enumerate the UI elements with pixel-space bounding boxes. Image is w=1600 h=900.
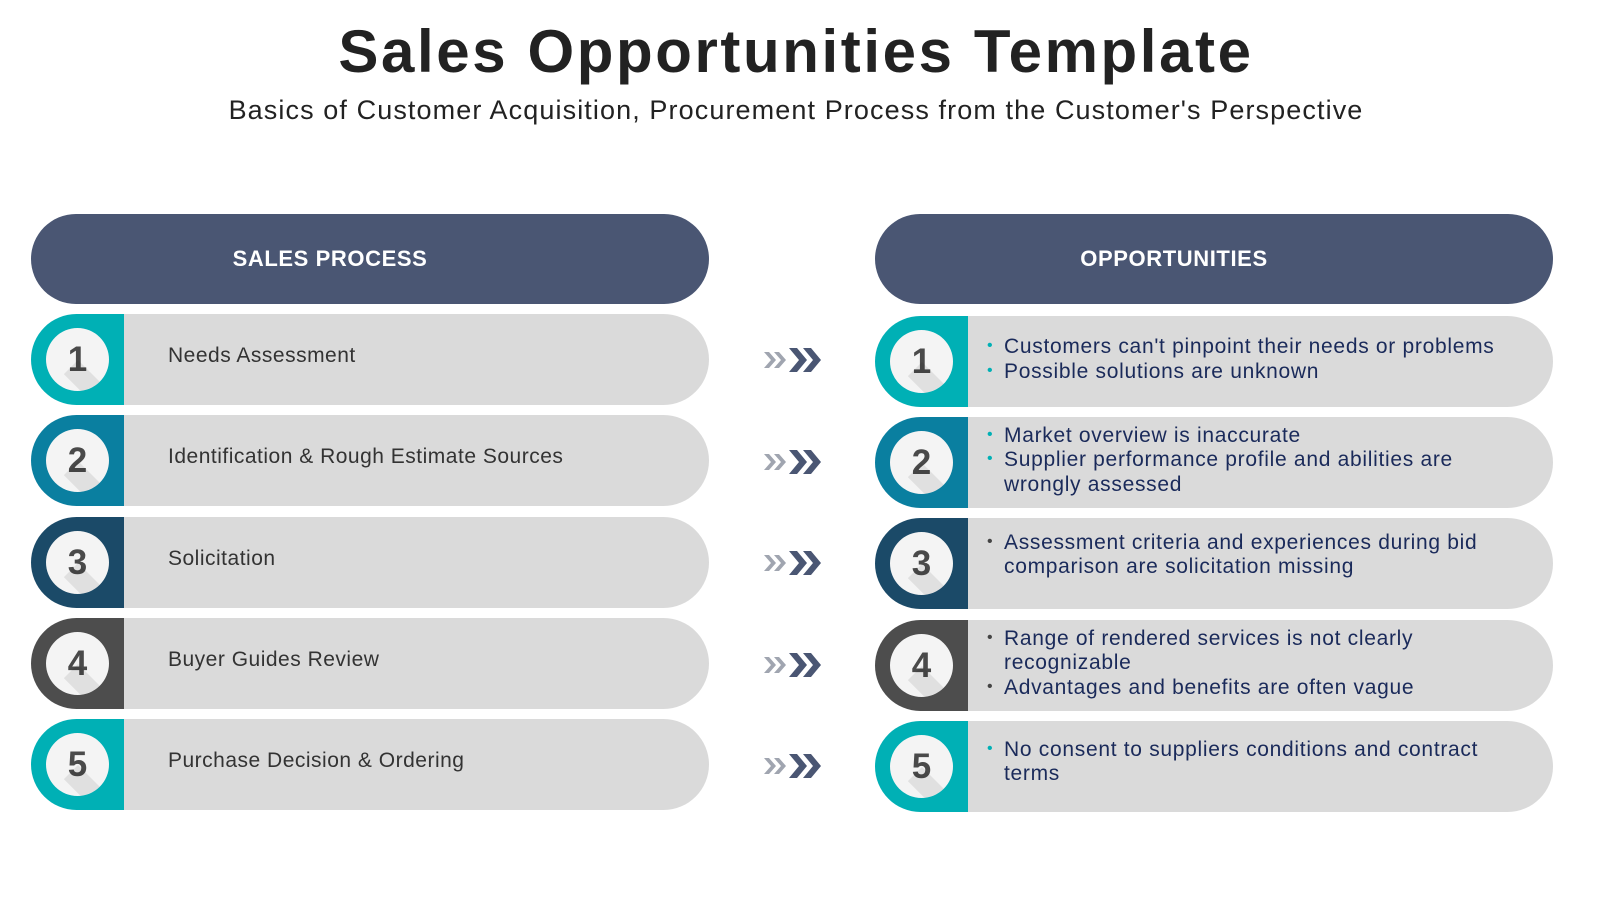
left row 4: Buyer Guides Review xyxy=(168,648,379,671)
right row 5: No consent to suppliers conditions and contract xyxy=(1004,738,1478,761)
left row 4 xyxy=(31,618,709,709)
subtitle: Basics of Customer Acquisition, Procurement Process from the Customer's Perspective xyxy=(229,95,1363,125)
right row 2: Supplier performance profile and abilities are xyxy=(1004,448,1453,471)
title: Sales Opportunities Template xyxy=(338,18,1254,85)
right row 4: Range of rendered services is not clearly xyxy=(1004,627,1413,650)
right row 4: Advantages and benefits are often vague xyxy=(1004,676,1414,699)
right row 3: Assessment criteria and experiences during bid xyxy=(1004,531,1477,554)
left row 2 xyxy=(31,415,709,506)
right row 1: Customers can't pinpoint their needs or problems xyxy=(1004,335,1495,358)
right row 3 xyxy=(875,518,1553,609)
header: sales process: SALES PROCESS xyxy=(233,246,427,271)
left row 4: 4 xyxy=(68,644,87,683)
left row 1: Needs Assessment xyxy=(168,344,356,367)
header: opportunities xyxy=(875,214,1553,304)
right row 3: 3 xyxy=(912,544,931,583)
arrow 5 xyxy=(764,754,821,778)
left row 5: 5 xyxy=(68,745,87,784)
arrow 3 xyxy=(764,551,821,575)
right row 4: 4 xyxy=(912,646,931,685)
arrow 4 xyxy=(764,653,821,677)
arrow 2 xyxy=(764,450,821,474)
left row 1 xyxy=(31,314,709,405)
right row 3: comparison are solicitation missing xyxy=(1004,555,1354,578)
right row 5: terms xyxy=(1004,762,1060,785)
right row 1: 1 xyxy=(912,342,931,381)
right row 1: Possible solutions are unknown xyxy=(1004,360,1319,382)
right row 4 xyxy=(875,620,1553,711)
left row 5: Purchase Decision & Ordering xyxy=(168,749,464,772)
header: opportunities: OPPORTUNITIES xyxy=(1080,246,1268,271)
right row 2: Market overview is inaccurate xyxy=(1004,424,1301,447)
right row 1 xyxy=(875,316,1553,407)
right row 4: recognizable xyxy=(1004,651,1131,674)
left row 2: Identification & Rough Estimate Sources xyxy=(168,445,563,468)
left row 2: 2 xyxy=(68,441,87,480)
right row 5 xyxy=(875,721,1553,812)
right row 2: 2 xyxy=(912,443,931,482)
right row 2: wrongly assessed xyxy=(1004,473,1182,496)
right row 2 xyxy=(875,417,1553,508)
right row 5: 5 xyxy=(912,747,931,786)
left row 3 xyxy=(31,517,709,608)
arrow 1 xyxy=(764,348,821,372)
header: sales process xyxy=(31,214,709,304)
left row 3: Solicitation xyxy=(168,547,276,570)
left row 5 xyxy=(31,719,709,810)
left row 1: 1 xyxy=(68,340,87,379)
left row 3: 3 xyxy=(68,543,87,582)
